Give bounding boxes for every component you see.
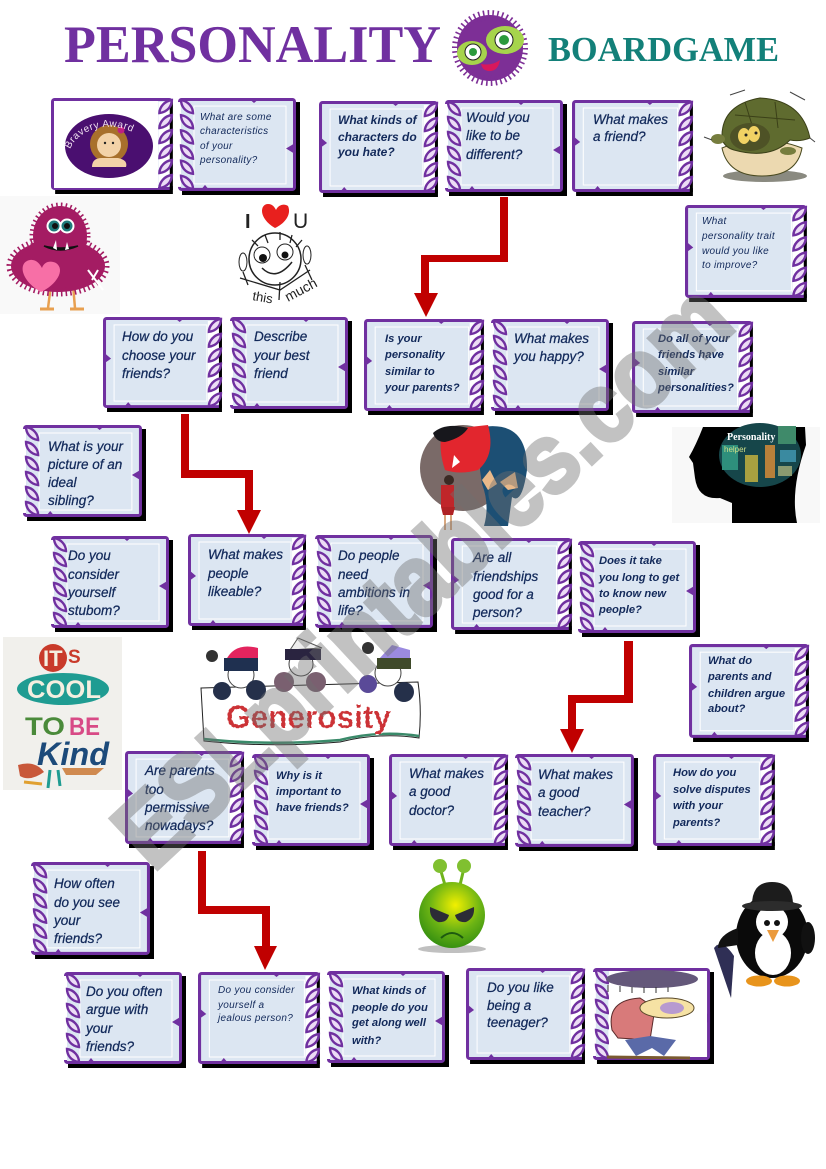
card: choose your friends <box>104 317 226 412</box>
card: good teacher: What makes <box>538 767 613 782</box>
card: often argue <box>64 972 186 1068</box>
card: what makes a friend <box>573 100 697 196</box>
icon: it's cool to be kind poster: Kind <box>37 736 110 772</box>
card: good teacher: teacher? <box>538 804 591 819</box>
icon: I love U doodle <box>239 204 320 307</box>
card: parents and children argue: about? <box>708 703 745 715</box>
card: get along well: with? <box>352 1035 381 1047</box>
card: being a teenager: teenager? <box>487 1015 548 1030</box>
card: what makes you happy: you happy? <box>513 349 584 364</box>
card: friendships good <box>452 538 576 634</box>
card: permissive parents: too <box>145 782 164 797</box>
card: likeable: people <box>207 566 249 581</box>
card: characters you hate: What kinds of <box>338 113 418 127</box>
card: what makes you happy: What makes <box>514 331 589 346</box>
card: ideal sibling <box>23 425 146 521</box>
card: friendships good: good for a <box>473 587 534 602</box>
card: stubborn <box>51 536 173 632</box>
card: solve disputes <box>654 754 779 850</box>
card: solve disputes: solve disputes <box>673 784 751 796</box>
card: likeable <box>189 534 310 630</box>
card: ambitions <box>315 535 437 632</box>
icon: generosity banner with three snowmen <box>201 638 420 745</box>
card: friends similar personalities: similar <box>658 366 695 378</box>
icon: angry green alien <box>418 859 486 953</box>
card: personality trait <box>686 205 811 302</box>
watermark: ESLprintables.com: ESLprintables.com <box>92 262 753 889</box>
card: good teacher <box>515 754 638 851</box>
icon: turtle hiding in shell <box>704 90 815 182</box>
card: good doctor <box>390 754 512 850</box>
card: solve disputes: How do you <box>673 767 737 779</box>
card: personality trait: to improve? <box>702 260 758 271</box>
arrow 4 <box>198 851 277 970</box>
card: being a teenager: Do you like <box>487 980 554 995</box>
card: good doctor: a good <box>409 784 451 799</box>
icon: it's cool to be kind poster: COOL <box>27 676 101 704</box>
card: parents and children argue: What do <box>708 655 752 667</box>
card: often argue: your <box>85 1021 113 1036</box>
card: friendships good: friendships <box>473 569 539 584</box>
card: likeable: likeable? <box>208 584 262 599</box>
icon: head silhouette with word cloud: helper <box>724 445 747 454</box>
card: best friend <box>230 317 352 413</box>
card: ambitions: Do people <box>338 548 400 563</box>
card: good doctor: doctor? <box>409 803 455 818</box>
card: ambitions: need <box>338 567 369 582</box>
card: stubborn: Do you <box>68 548 111 563</box>
arrow 2 <box>181 414 261 534</box>
card: permissive parents: nowadays? <box>145 818 214 833</box>
icon: I love U doodle: U <box>293 210 308 233</box>
icon: I love U doodle: much <box>282 274 320 305</box>
card: characters you hate <box>320 101 442 197</box>
card: friends similar personalities <box>633 321 757 417</box>
icon: I love U doodle: I <box>245 211 251 233</box>
card: choose your friends: friends? <box>122 366 171 381</box>
icon: head silhouette with word cloud: Personality <box>727 432 775 443</box>
card: permissive parents: Are parents <box>144 763 215 778</box>
card: friends similar personalities: friends have <box>658 349 724 361</box>
card: friends similar personalities: Do all of your <box>658 333 730 345</box>
card: know new people: to know new <box>599 588 667 600</box>
icon: it's cool to be kind poster <box>3 637 122 790</box>
card: characteristics <box>178 98 300 195</box>
icon: it's cool to be kind poster: IT <box>43 646 63 671</box>
card: characteristics: What are some <box>200 112 272 123</box>
card: friendships good: Are all <box>472 550 512 565</box>
card: personality trait: would you like <box>702 246 769 257</box>
card: sad man in the rain image <box>593 968 714 1064</box>
card: likeable: What makes <box>208 547 283 562</box>
card: solve disputes: with your <box>673 800 723 812</box>
card: characteristics: characteristics <box>200 126 268 137</box>
icon: it's cool to be kind poster: S <box>68 647 81 668</box>
card: best friend: your best <box>253 348 311 363</box>
card: how often friends: do you see <box>54 895 120 910</box>
arrow 1 <box>414 197 508 317</box>
card: ambitions: ambitions in <box>338 585 410 600</box>
card: being a teenager: being a <box>487 998 532 1013</box>
card: being a teenager <box>467 968 589 1064</box>
card: often argue: friends? <box>86 1039 135 1054</box>
card: ideal sibling: What is your <box>48 439 124 454</box>
icon: generosity banner with three snowmen: Generosity <box>226 699 391 735</box>
card: bravery award image <box>51 98 174 194</box>
card: know new people: people? <box>598 604 642 616</box>
card: characters you hate: characters do <box>338 130 417 144</box>
icon: purple fuzzy monster <box>457 15 524 81</box>
card: jealous person <box>199 972 324 1068</box>
card: get along well: What kinds of <box>352 985 427 997</box>
card: jealous person: yourself a <box>217 1000 264 1011</box>
card: how often friends: How often <box>54 876 115 891</box>
card: bravery award image: Bravery Award <box>64 120 134 148</box>
card: similar to parents <box>365 319 488 415</box>
card: stubborn: yourself <box>67 585 117 600</box>
card: parents and children argue: children argue <box>708 688 785 700</box>
icon: head silhouette with word cloud <box>672 423 820 523</box>
card: parents and children argue: parents and <box>707 671 773 683</box>
card: important to have friends <box>252 754 374 850</box>
icon: penguin with bowler hat and umbrella <box>714 882 815 998</box>
card: would you like to be different <box>445 100 567 196</box>
card: characteristics: personality? <box>199 155 258 166</box>
card: how often friends: your <box>53 913 81 928</box>
card: get along well: get along well <box>351 1017 427 1029</box>
card: friends similar personalities: personalities? <box>657 382 734 394</box>
card: permissive parents: permissive <box>144 800 210 815</box>
card: important to have friends: have friends? <box>276 802 349 814</box>
card: important to have friends: important to <box>276 786 341 798</box>
card: personality trait: personality trait <box>701 231 776 242</box>
card: choose your friends: How do you <box>122 329 194 344</box>
card: good teacher: a good <box>538 785 580 800</box>
card: permissive parents <box>126 751 248 848</box>
icon: pink monster with heart <box>0 196 120 314</box>
card: know new people: Does it take <box>599 555 662 567</box>
card: often argue: Do you often <box>86 984 163 999</box>
card: would you like to be different: Would you <box>466 110 530 125</box>
card: would you like to be different: different? <box>466 147 523 162</box>
card: how often friends <box>31 862 154 959</box>
card: what makes a friend: What makes <box>593 112 668 127</box>
card: jealous person: Do you consider <box>218 985 295 996</box>
card: what makes a friend: a friend? <box>593 129 646 144</box>
card: know new people <box>578 541 700 637</box>
title: BOARDGAME: BOARDGAME <box>548 30 779 69</box>
card: ideal sibling: picture of an <box>47 457 122 472</box>
card: how often friends: friends? <box>54 931 103 946</box>
card: would you like to be different: like to be <box>466 128 520 143</box>
card: stubborn: consider <box>68 567 120 582</box>
card: similar to parents: your parents? <box>384 382 460 394</box>
card: similar to parents: personality <box>384 349 445 361</box>
card: jealous person: jealous person? <box>216 1013 293 1024</box>
card: personality trait: What <box>702 216 727 227</box>
card: stubborn: stubom? <box>68 603 120 618</box>
icon: it's cool to be kind poster: BE <box>69 713 100 741</box>
card: what makes you happy <box>491 319 613 415</box>
card: characters you hate: you hate? <box>337 145 395 159</box>
icon: angry man shouting at small woman <box>420 425 527 530</box>
card: characteristics: of your <box>200 141 233 152</box>
card: good doctor: What makes <box>409 766 484 781</box>
card: parents and children argue <box>690 644 813 742</box>
card: ambitions: life? <box>338 603 363 618</box>
card: ideal sibling: sibling? <box>48 493 94 508</box>
card: choose your friends: choose your <box>122 348 196 363</box>
card: often argue: argue with <box>86 1002 148 1017</box>
icon: it's cool to be kind poster: TO <box>25 713 65 741</box>
card: best friend: Describe <box>254 329 307 344</box>
title: PERSONALITY: PERSONALITY <box>64 16 441 74</box>
icon: I love U doodle: this <box>251 288 274 307</box>
card: friendships good: person? <box>472 605 522 620</box>
card: similar to parents: similar to <box>385 366 435 378</box>
card: best friend: friend <box>254 366 288 381</box>
card: know new people: you long to get <box>598 572 680 584</box>
card: solve disputes: parents? <box>672 817 720 829</box>
card: ideal sibling: ideal <box>48 475 78 490</box>
card: important to have friends: Why is it <box>276 770 323 782</box>
card: similar to parents: Is your <box>385 333 422 345</box>
card: get along well: people do you <box>351 1002 428 1014</box>
card: get along well <box>327 971 449 1067</box>
arrow 3 <box>560 641 633 753</box>
